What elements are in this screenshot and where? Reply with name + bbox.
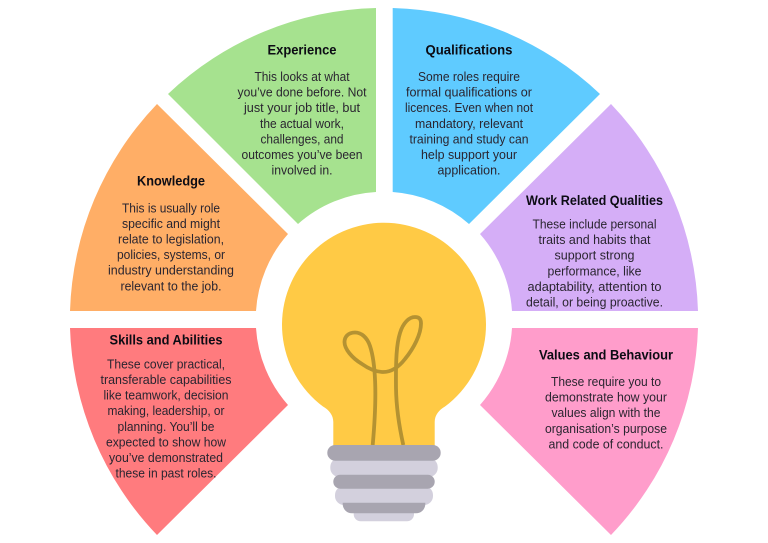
text: Experience description: just your job title, but xyxy=(243,101,361,115)
text: Work Related Qualities description: These include personal xyxy=(532,218,656,232)
text: Work Related Qualities description: traits and habits that xyxy=(538,233,651,247)
text: Experience description xyxy=(238,70,367,178)
text: Qualifications description: mandatory, relevant xyxy=(415,117,524,131)
heading: Values and Behaviour: Values and Behaviour xyxy=(539,347,674,362)
text: Values and Behaviour description: organisation’s purpose xyxy=(545,422,667,436)
text: Qualifications description: application. xyxy=(438,164,500,178)
heading: Work Related Qualities: Work Related Qualities xyxy=(526,193,663,208)
text: Skills and Abilities description: planning. You’ll be xyxy=(118,420,215,434)
text: Experience description: challenges, and xyxy=(260,132,344,146)
panel: Knowledge xyxy=(70,104,288,311)
text: Skills and Abilities description: you’ve demonstrated xyxy=(109,451,223,465)
text: Values and Behaviour description: and code of conduct. xyxy=(548,437,664,451)
icon: light bulb xyxy=(282,223,486,521)
text: Skills and Abilities description: These cover practical, xyxy=(107,357,225,371)
text: Qualifications description: formal qualifications or xyxy=(406,86,532,100)
bulb glass xyxy=(282,223,486,446)
text: Knowledge description: relate to legislation, xyxy=(118,232,224,246)
panel: Qualifications xyxy=(393,8,600,224)
heading: Skills and Abilities: Skills and Abilities xyxy=(110,332,222,347)
text: Qualifications description: Some roles require xyxy=(418,70,520,84)
text: Values and Behaviour description xyxy=(545,375,667,451)
text: Work Related Qualities description: detail, or being proactive. xyxy=(526,296,663,310)
panel: Skills and Abilities xyxy=(70,328,288,535)
text: Qualifications description xyxy=(405,70,533,178)
text: Experience description: This looks at what xyxy=(254,70,350,84)
text: Experience description: you’ve done before. Not xyxy=(238,86,367,100)
heading: Experience: Experience xyxy=(268,42,337,58)
text: Skills and Abilities description: transferable capabilities xyxy=(100,373,232,387)
text: Knowledge description: specific and might xyxy=(122,217,221,231)
heading: Qualifications: Qualifications xyxy=(426,42,512,58)
text: Skills and Abilities description: these in past roles. xyxy=(116,467,216,481)
panel: Work Related Qualities xyxy=(480,104,698,311)
text: Knowledge description: This is usually role xyxy=(122,201,220,215)
filament xyxy=(344,317,421,445)
text: Qualifications description: help support your xyxy=(421,148,517,162)
text: Values and Behaviour description: These require you to xyxy=(551,375,661,389)
text: Experience description: the actual work, xyxy=(260,117,344,131)
text: Knowledge description: policies, systems, or xyxy=(117,248,225,262)
panel: Values and Behaviour xyxy=(480,328,698,535)
text: Work Related Qualities description: performance, like xyxy=(548,264,642,278)
heading: Knowledge: Knowledge xyxy=(137,174,205,189)
text: Experience description: involved in. xyxy=(272,164,332,178)
text: Qualifications description: licences. Even when not xyxy=(405,101,533,115)
text: Knowledge description xyxy=(108,201,234,293)
text: Experience description: outcomes you’ve been xyxy=(242,148,363,162)
text: Knowledge description: relevant to the job. xyxy=(120,279,222,293)
panel: Experience xyxy=(168,8,376,224)
screw base xyxy=(327,445,441,521)
text: Skills and Abilities description: like teamwork, decision xyxy=(104,389,229,403)
text: Skills and Abilities description xyxy=(100,357,232,481)
text: Work Related Qualities description: adaptability, attention to xyxy=(528,280,662,294)
text: Work Related Qualities description: support strong xyxy=(554,249,635,263)
text: Skills and Abilities description: making, leadership, or xyxy=(108,404,224,418)
text: Values and Behaviour description: values align with the xyxy=(552,406,661,420)
text: Work Related Qualities description xyxy=(526,218,663,310)
text: Qualifications description: training and study can xyxy=(410,132,529,146)
text: Skills and Abilities description: expected to show how xyxy=(106,435,227,449)
text: Values and Behaviour description: demonstrate how your xyxy=(545,391,667,405)
text: Knowledge description: industry understanding xyxy=(108,264,234,278)
